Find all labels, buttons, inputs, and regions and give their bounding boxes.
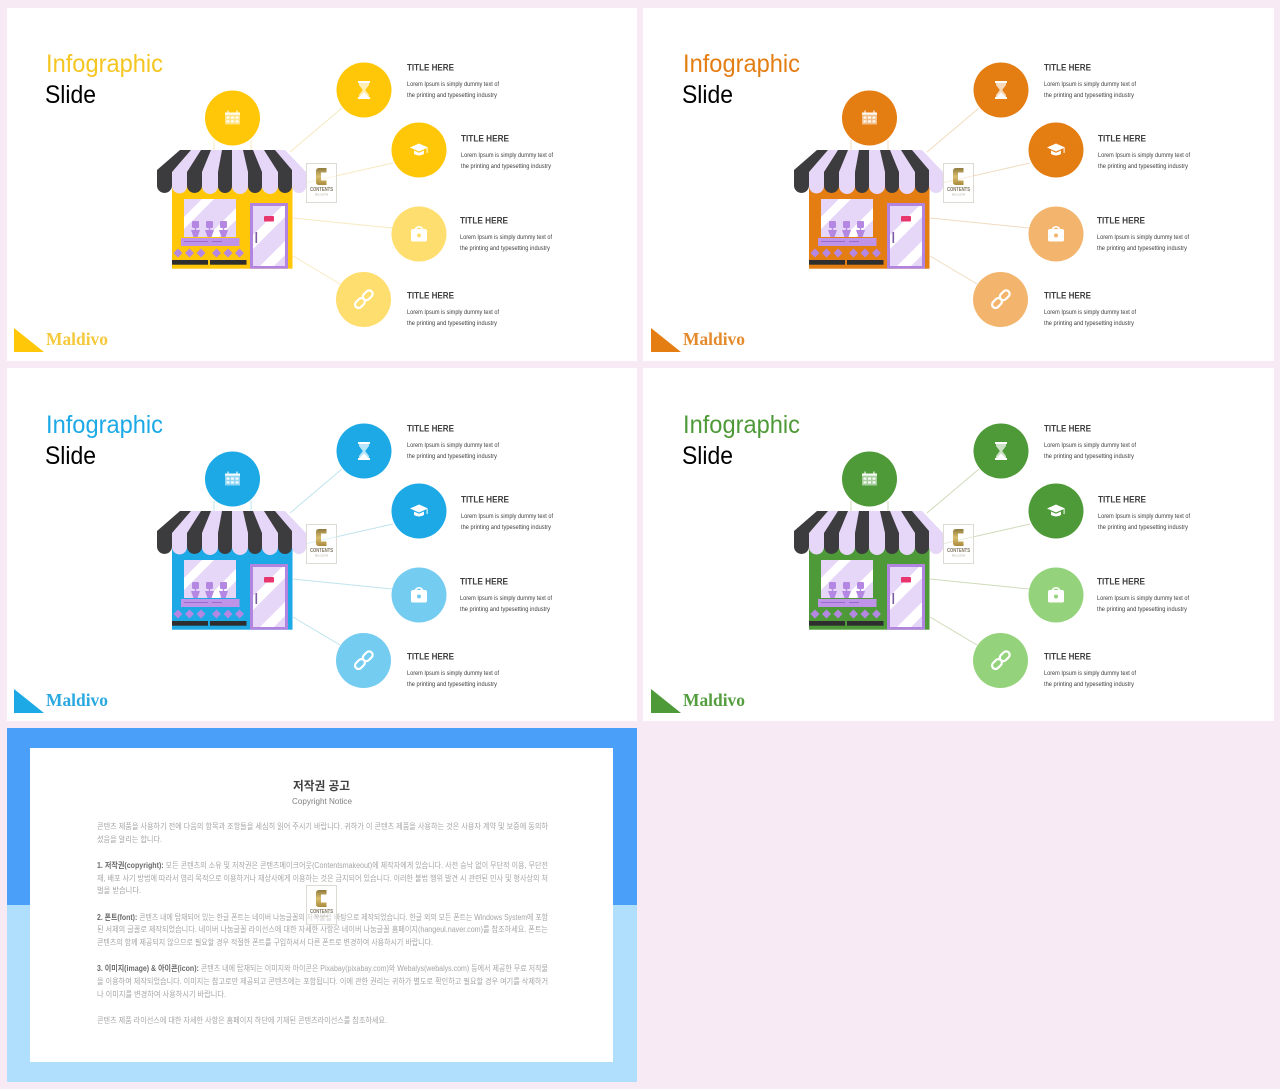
brand mark: Maldivo <box>46 690 108 710</box>
panel: blue slide <box>7 368 637 721</box>
slide title: Infographic <box>683 50 800 78</box>
notice section 1: copyright: 재, 배포 사기 방법에 따라서 영리 목적으로 이용하거나 재상사에게 이용하는 것은 금지되어 있습니다. 이러한 불법 행위 발견 시 관련된 민사 및 형사상의 처 <box>97 873 548 883</box>
icon circle: calendar <box>842 90 897 146</box>
brand mark: Maldivo <box>683 329 745 349</box>
slide title: Infographic <box>46 50 163 78</box>
watermark logo <box>306 524 336 564</box>
item: camera bag: TITLE HERE <box>1097 576 1145 588</box>
notice section 2: font: 콘텐츠의 함께 제공되지 않으므로 필요할 경우 적절한 폰트를 구입하셔서 다른 폰트로 변경하여 사용하시기 바랍니다. <box>97 937 433 947</box>
notice section 2: font: 된 서체의 글꼴로 제작되었습니다. 네이버 나눔글꼴 라이선스에 대한 자세한 사항은 네이버 나눔글꼴 홈페이지(hangeul.naver.com)를 참조하세요. 폰트는 <box>97 924 548 934</box>
watermark logo <box>306 164 336 202</box>
item: hourglass: TITLE HERE <box>407 424 454 434</box>
item: camera bag <box>1028 568 1189 622</box>
notice footer: 콘텐츠 제품 라이선스에 대한 자세한 사항은 홈페이지 하단에 기재된 콘텐츠라이선스를 참조하세요. <box>97 1015 387 1025</box>
item: hourglass <box>974 62 1136 118</box>
notice section 1: copyright: 1. 저작권(copyright): 모든 콘텐츠의 소유 및 저작권은 콘텐츠메이크어웃(Contentsmakeout)에 제작자에게 있습니다. 사전 승낙 없이 무단적 이용, 무단전 <box>97 860 548 870</box>
item: link <box>336 633 499 688</box>
item: hourglass: Lorem Ipsum is simply dummy text of <box>407 442 499 449</box>
item: hourglass: Lorem Ipsum is simply dummy text of <box>1044 442 1136 449</box>
item: link: TITLE HERE <box>1044 652 1091 662</box>
item: link: TITLE HERE <box>407 290 454 302</box>
item: hourglass <box>336 424 499 478</box>
icon circle: calendar <box>205 452 260 506</box>
item: camera bag: Lorem Ipsum is simply dummy text of <box>460 234 552 241</box>
icon circle: calendar <box>205 90 260 146</box>
slide title: Slide <box>45 442 96 470</box>
connector lines <box>851 469 1030 645</box>
notice intro <box>97 821 549 844</box>
item: graduation cap: the printing and typesetting industry <box>1098 524 1189 531</box>
item: graduation cap: Lorem Ipsum is simply dummy text of <box>461 513 553 520</box>
item: graduation cap <box>1028 484 1190 538</box>
notice section 3: image and icon: 을 이용하여 제작되었습니다. 이미지는 참고로만 제공되고 콘텐츠에는 포함됩니다. 이에 관한 권리는 귀하가 별도로 확인하고 필요할 경우 여기를 삭제하거 <box>97 976 548 986</box>
brand mark <box>14 328 108 352</box>
item: link: TITLE HERE <box>1044 290 1091 302</box>
item: hourglass <box>974 424 1136 478</box>
item: camera bag: the printing and typesetting industry <box>460 606 551 613</box>
shop illustration <box>794 150 943 269</box>
item: hourglass: Lorem Ipsum is simply dummy text of <box>407 81 499 88</box>
item: hourglass: TITLE HERE <box>407 62 454 74</box>
item: camera bag: TITLE HERE <box>1097 216 1145 226</box>
item: camera bag <box>392 206 552 262</box>
item: link <box>973 272 1136 327</box>
item: hourglass: the printing and typesetting industry <box>407 92 498 99</box>
notice section 3: image and icon: 나 이미지를 변경하여 사용하시기 바랍니다. <box>97 989 226 999</box>
item: camera bag: TITLE HERE <box>460 216 508 226</box>
slide title: Slide <box>682 81 733 109</box>
item: link: the printing and typesetting industry <box>407 681 498 688</box>
slide title: Infographic <box>46 411 163 439</box>
shop illustration <box>157 150 306 269</box>
slide title <box>682 50 800 109</box>
item: graduation cap: TITLE HERE <box>461 134 509 144</box>
slide title: Slide <box>682 442 733 470</box>
connector lines <box>214 469 393 645</box>
watermark logo <box>944 164 974 202</box>
item: hourglass: TITLE HERE <box>1044 62 1091 74</box>
notice section 1: copyright <box>97 860 548 895</box>
notice heading: Copyright Notice <box>292 796 352 806</box>
panel: orange slide <box>643 8 1274 361</box>
shop illustration <box>157 511 306 630</box>
notice intro: 콘텐츠 제품을 사용하기 전에 다음의 항목과 조항들을 세심히 읽어 주시기 바랍니다. 귀하가 이 콘텐츠 제품을 사용하는 것은 사용자 계약 및 보증에 동의하 <box>97 821 549 831</box>
notice section 2: font <box>97 912 549 947</box>
notice heading <box>292 778 352 806</box>
item: hourglass: the printing and typesetting industry <box>1044 453 1135 460</box>
panel: copyright notice <box>7 728 637 1082</box>
item: graduation cap <box>392 484 553 538</box>
panel: yellow slide <box>7 8 637 361</box>
watermark logo <box>306 886 336 924</box>
brand mark <box>651 689 745 713</box>
brand mark: Maldivo <box>683 690 745 710</box>
item: camera bag: Lorem Ipsum is simply dummy text of <box>1097 595 1189 602</box>
brand mark: Maldivo <box>46 329 108 349</box>
item: camera bag: the printing and typesetting industry <box>460 245 551 252</box>
slide title <box>682 411 800 470</box>
item: graduation cap: the printing and typesetting industry <box>461 524 552 531</box>
item: graduation cap: the printing and typesetting industry <box>1098 163 1189 170</box>
item: link <box>336 272 499 327</box>
item: camera bag: the printing and typesetting industry <box>1097 606 1188 613</box>
slide title <box>45 411 163 470</box>
slide title <box>45 50 163 109</box>
item: graduation cap: Lorem Ipsum is simply dummy text of <box>1098 513 1190 520</box>
item: link: the printing and typesetting industry <box>1044 320 1135 327</box>
connector lines <box>214 108 393 284</box>
item: graduation cap: TITLE HERE <box>1098 494 1146 506</box>
item: link: the printing and typesetting industry <box>1044 681 1135 688</box>
item: camera bag: Lorem Ipsum is simply dummy text of <box>460 595 552 602</box>
item: graduation cap: Lorem Ipsum is simply dummy text of <box>461 152 553 159</box>
item: link: Lorem Ipsum is simply dummy text of <box>1044 670 1136 677</box>
notice heading: 저작권 공고 <box>293 778 350 793</box>
item: camera bag: the printing and typesetting industry <box>1097 245 1188 252</box>
item: hourglass: the printing and typesetting industry <box>407 453 498 460</box>
slide title: Slide <box>45 81 96 109</box>
item: camera bag: TITLE HERE <box>460 576 508 588</box>
item: graduation cap <box>1028 122 1190 178</box>
item: link: the printing and typesetting industry <box>407 320 498 327</box>
item: graduation cap: the printing and typesetting industry <box>461 163 552 170</box>
item: camera bag <box>1028 206 1189 262</box>
notice section 2: font: 2. 폰트(font): 콘텐츠 내에 탑재되어 있는 한글 폰트는 네이버 나눔글꼴의 저작물을 바탕으로 제작되었습니다. 한글 외의 모든 폰트는 Windows System에 포함 <box>97 912 549 922</box>
panel: green slide <box>643 368 1274 721</box>
item: camera bag <box>392 568 552 622</box>
item: camera bag: Lorem Ipsum is simply dummy text of <box>1097 234 1189 241</box>
item: hourglass: TITLE HERE <box>1044 424 1091 434</box>
slide title: Infographic <box>683 411 800 439</box>
item: link: Lorem Ipsum is simply dummy text of <box>407 309 499 316</box>
notice section 1: copyright: 벌을 받습니다. <box>97 885 141 895</box>
item: link: TITLE HERE <box>407 652 454 662</box>
item: hourglass: Lorem Ipsum is simply dummy text of <box>1044 81 1136 88</box>
watermark logo <box>944 524 974 564</box>
item: graduation cap: Lorem Ipsum is simply dummy text of <box>1098 152 1190 159</box>
item: link <box>973 633 1136 688</box>
item: hourglass: the printing and typesetting industry <box>1044 92 1135 99</box>
shop illustration <box>794 511 943 630</box>
notice section 3: image and icon: 3. 이미지(image) & 아이콘(icon): 콘텐츠 내에 탑재되는 이미지와 아이콘은 Pixabay(pixabay.com)와 Webalys(webalys.com) 등에서 제공한 무료 저작물 <box>97 963 548 973</box>
item: graduation cap: TITLE HERE <box>461 494 509 506</box>
item: graduation cap: TITLE HERE <box>1098 134 1146 144</box>
item: hourglass <box>336 62 499 118</box>
brand mark <box>14 689 108 713</box>
icon circle: calendar <box>842 452 897 506</box>
item: graduation cap <box>392 122 553 178</box>
item: link: Lorem Ipsum is simply dummy text of <box>407 670 499 677</box>
notice section 3: image and icon <box>97 963 548 999</box>
item: link: Lorem Ipsum is simply dummy text of <box>1044 309 1136 316</box>
notice intro: 셨음을 알리는 합니다. <box>97 834 162 844</box>
connector lines <box>851 108 1030 284</box>
brand mark <box>651 328 745 352</box>
